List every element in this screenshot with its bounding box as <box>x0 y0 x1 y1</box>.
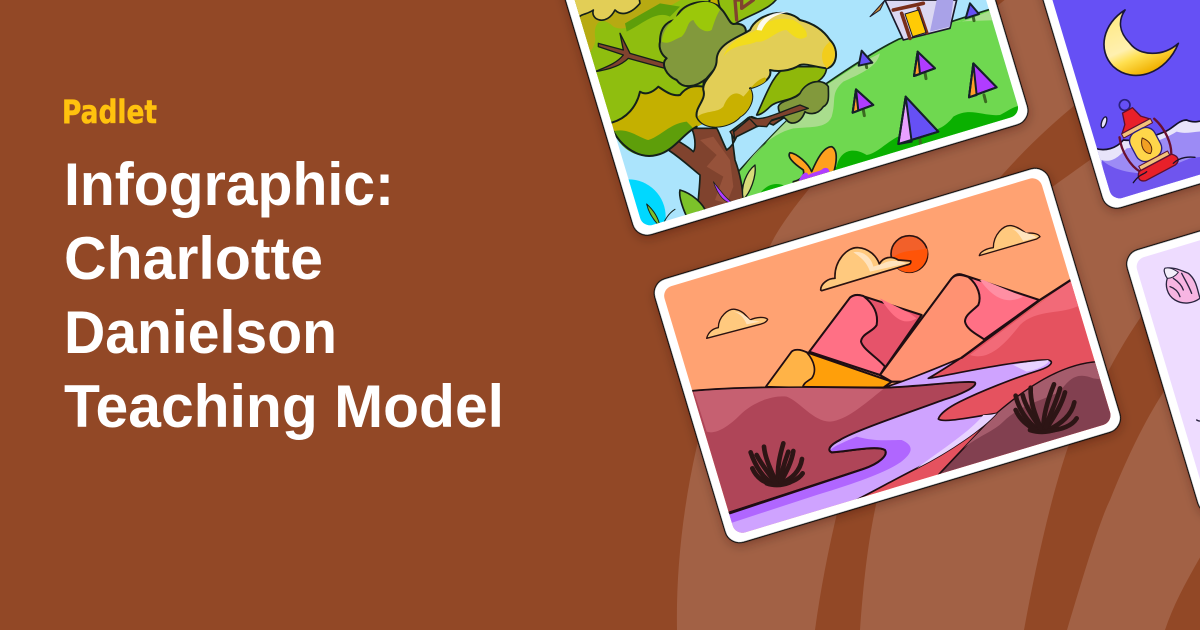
foreground plants <box>678 189 706 216</box>
left land <box>683 382 975 513</box>
title: Charlotte <box>64 225 323 292</box>
top green clump <box>717 0 777 23</box>
lantern <box>1118 98 1179 182</box>
sun <box>891 236 928 272</box>
title <box>64 151 504 440</box>
purple river <box>727 358 1051 542</box>
card: desert mountains illustration <box>650 165 1133 552</box>
brown hill <box>937 361 1110 475</box>
waves <box>1096 119 1200 170</box>
background stripes <box>677 0 1200 630</box>
right bush <box>1016 384 1077 432</box>
red hill <box>858 280 1110 498</box>
card: crescent moon and lantern illustration <box>1038 0 1200 216</box>
title: Infographic: <box>64 151 394 218</box>
left bush <box>751 443 803 485</box>
card: seashell illustration <box>1123 228 1200 516</box>
shell <box>1164 268 1200 303</box>
far mountain <box>809 295 922 375</box>
clouds <box>821 248 911 291</box>
logo: Padlet: Padlet <box>62 93 157 131</box>
title: Danielson <box>64 299 337 366</box>
hill <box>738 8 1018 200</box>
moon <box>1104 10 1178 75</box>
purple-orange trees <box>853 3 997 147</box>
olive blob <box>660 2 746 86</box>
middle mountain <box>880 274 1039 382</box>
branch left <box>595 33 665 72</box>
left canopy <box>574 0 718 140</box>
card: tree and hill illustration <box>550 0 1050 254</box>
trunk <box>668 116 784 212</box>
lower right green <box>757 67 827 115</box>
sky <box>664 178 1110 533</box>
small olive blob <box>778 82 829 123</box>
flower <box>789 147 836 187</box>
house <box>885 0 957 40</box>
orange dune <box>766 350 892 388</box>
title: Teaching Model <box>64 373 504 440</box>
yellow blob <box>697 13 836 127</box>
